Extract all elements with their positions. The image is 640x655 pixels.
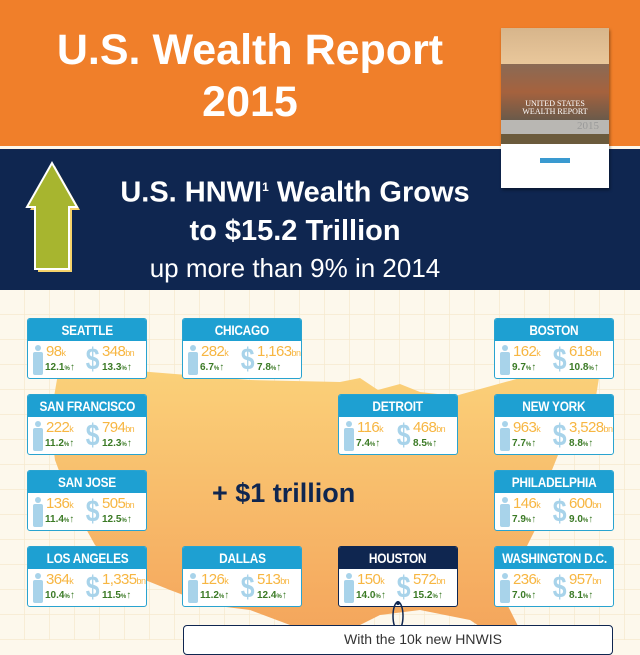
card: San Francisco: 11.2%↑ <box>45 438 74 449</box>
card: San Francisco <box>27 394 147 455</box>
card: Dallas: 11.2%↑ <box>200 590 229 601</box>
card: Los Angeles <box>27 546 147 607</box>
card: San Jose: 12.5%↑ <box>102 514 132 525</box>
card: Boston: $ <box>553 341 567 376</box>
card: Los Angeles: $ <box>86 569 100 604</box>
card: Seattle: 12.1%↑ <box>45 362 75 373</box>
card: New York: 963k <box>513 419 540 436</box>
navy banner <box>0 149 640 290</box>
card: San Jose: 136k <box>46 495 73 512</box>
card: Houston: HOUSTON <box>369 551 427 566</box>
card: Seattle: 348bn <box>102 343 134 360</box>
card: Seattle <box>27 318 147 379</box>
card: San Jose: 505bn <box>102 495 134 512</box>
card: Philadelphia: 7.9%↑ <box>512 514 536 525</box>
headline: U.S. HNWI1 Wealth Grows <box>120 177 470 209</box>
card: Detroit: $ <box>397 417 411 452</box>
headline: to $15.2 Trillion <box>189 215 401 247</box>
card: Houston <box>338 546 458 607</box>
card: Philadelphia <box>494 470 614 531</box>
card: Boston: 618bn <box>569 343 601 360</box>
card: New York: 8.8%↑ <box>569 438 593 449</box>
report cover: UNITED STATES <box>525 99 585 108</box>
card: Los Angeles: 364k <box>46 571 73 588</box>
card: San Jose: SAN JOSE <box>58 475 116 490</box>
connector ring <box>392 601 404 625</box>
card: Washington D.C.: 236k <box>513 571 540 588</box>
card: Chicago: 1,163bn <box>257 343 300 360</box>
card: Philadelphia: 600bn <box>569 495 601 512</box>
card: Detroit: 468bn <box>413 419 445 436</box>
card: Washington D.C.: 957bn <box>569 571 601 588</box>
card: Chicago: 282k <box>201 343 228 360</box>
card: Seattle: $ <box>86 341 100 376</box>
card: San Francisco: 12.3%↑ <box>102 438 132 449</box>
card: San Francisco: $ <box>86 417 100 452</box>
bottom callout box: With the 10k new HNWIS <box>344 631 502 647</box>
card: Detroit: 116k <box>357 419 383 436</box>
card: Boston <box>494 318 614 379</box>
card: Detroit: 7.4%↑ <box>356 438 380 449</box>
report cover: 2015 <box>577 120 599 132</box>
card: New York <box>494 394 614 455</box>
card: Los Angeles: LOS ANGELES <box>46 551 128 566</box>
card: Dallas <box>182 546 302 607</box>
card: Boston: BOSTON <box>529 323 579 338</box>
card: Dallas: DALLAS <box>219 551 265 566</box>
card: Boston: 10.8%↑ <box>569 362 599 373</box>
card: New York: $ <box>553 417 567 452</box>
card: Chicago: 6.7%↑ <box>200 362 224 373</box>
card: Houston: 15.2%↑ <box>413 590 443 601</box>
card: Chicago: 7.8%↑ <box>257 362 281 373</box>
card: Seattle: 13.3%↑ <box>102 362 132 373</box>
card: Philadelphia: PHILADELPHIA <box>512 475 596 490</box>
card: San Francisco: SAN FRANCISCO <box>39 399 135 414</box>
bottom callout box <box>183 625 613 655</box>
card: Philadelphia: 146k <box>513 495 540 512</box>
card: Seattle: SEATTLE <box>61 323 113 338</box>
card: Chicago <box>182 318 302 379</box>
card: Houston: 150k <box>357 571 384 588</box>
title: U.S. Wealth Report <box>57 26 443 74</box>
card: Houston: 572bn <box>413 571 445 588</box>
card: San Francisco: 222k <box>46 419 73 436</box>
card: New York: 3,528bn <box>569 419 612 436</box>
card: San Jose: 11.4%↑ <box>45 514 74 525</box>
card: Washington D.C.: 8.1%↑ <box>569 590 593 601</box>
card: Detroit: 8.5%↑ <box>413 438 437 449</box>
report cover: WEALTH REPORT <box>522 107 588 116</box>
card: Dallas: 513bn <box>257 571 289 588</box>
card: Houston: 14.0%↑ <box>356 590 386 601</box>
card: New York: NEW YORK <box>522 399 586 414</box>
card: Boston: 162k <box>513 343 540 360</box>
card: Dallas: 12.4%↑ <box>257 590 287 601</box>
card: Los Angeles: 10.4%↑ <box>45 590 75 601</box>
report cover <box>501 28 609 188</box>
plus one trillion label: + $1 trillion <box>212 478 355 508</box>
card: Detroit: DETROIT <box>373 399 423 414</box>
header: orange title band <box>0 0 640 146</box>
card: Dallas: $ <box>241 569 255 604</box>
card: Los Angeles: 1,335bn <box>102 571 145 588</box>
card: Dallas: 126k <box>201 571 228 588</box>
headline: up more than 9% in 2014 <box>150 253 440 283</box>
title: 2015 <box>202 78 298 126</box>
card: Washington D.C.: WASHINGTON D.C. <box>502 551 607 566</box>
card: Washington D.C. <box>494 546 614 607</box>
card: Philadelphia: $ <box>553 493 567 528</box>
card: Washington D.C.: $ <box>553 569 567 604</box>
card: Houston: $ <box>397 569 411 604</box>
card: San Jose <box>27 470 147 531</box>
card: Los Angeles: 11.5%↑ <box>102 590 131 601</box>
card: New York: 7.7%↑ <box>512 438 536 449</box>
icon: up arrow <box>25 161 80 272</box>
card: Seattle: 98k <box>46 343 65 360</box>
card: Boston: 9.7%↑ <box>512 362 536 373</box>
card: Chicago: CHICAGO <box>215 323 269 338</box>
card: Washington D.C.: 7.0%↑ <box>512 590 536 601</box>
card: Detroit <box>338 394 458 455</box>
card: San Francisco: 794bn <box>102 419 134 436</box>
title <box>57 26 443 126</box>
card: Philadelphia: 9.0%↑ <box>569 514 593 525</box>
card: San Jose: $ <box>86 493 100 528</box>
background grid <box>0 290 640 640</box>
card: Chicago: $ <box>241 341 255 376</box>
headline <box>120 177 470 283</box>
